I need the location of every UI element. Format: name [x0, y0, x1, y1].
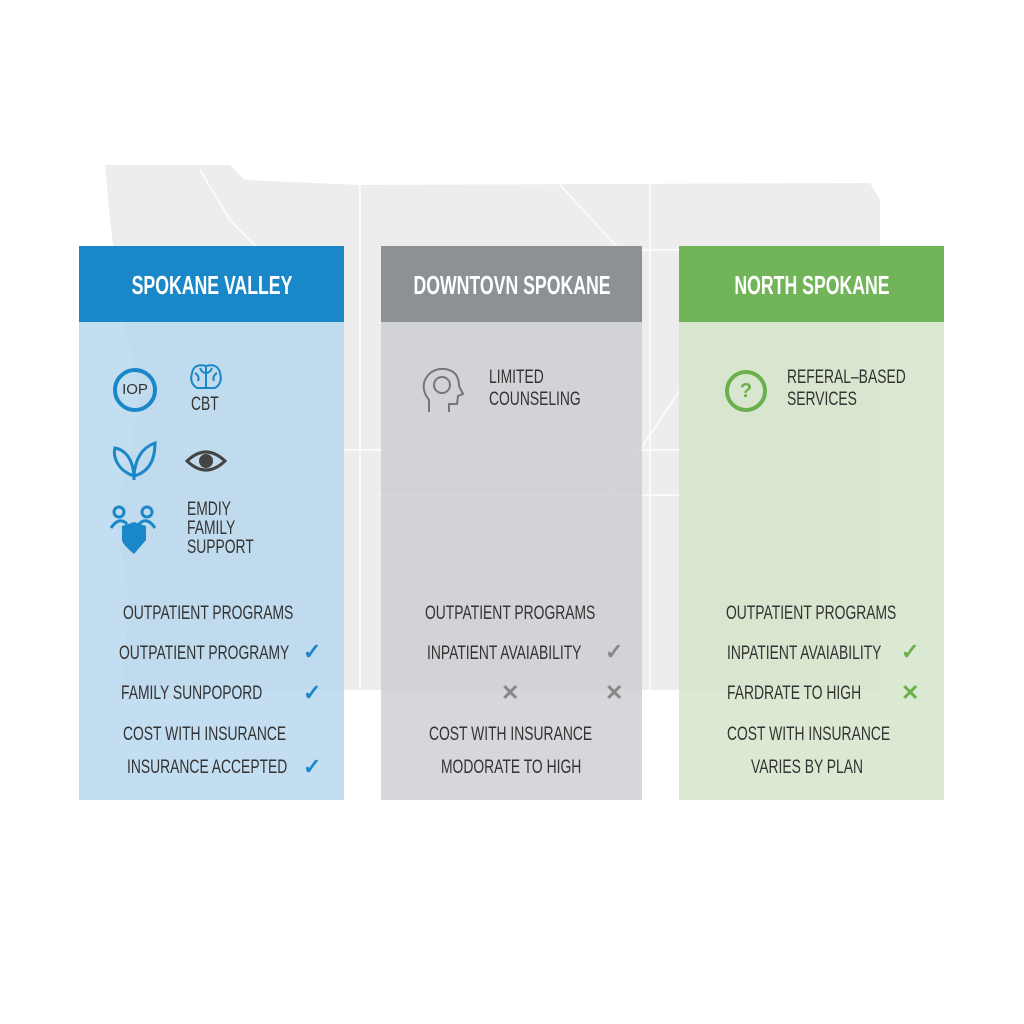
panel: Downtown Spokane	[381, 246, 642, 800]
heading: Downtown Spokane: DOWNTOVN SPOKANE	[413, 270, 610, 300]
icon: question bubble: ?	[740, 380, 752, 402]
panel: Downtown Spokane: ✓	[605, 639, 623, 664]
panel: Spokane Valley: ✓	[303, 754, 321, 779]
heading: Spokane Valley	[79, 246, 344, 322]
panel: Downtown Spokane: OUTPATIENT PROGRAMS	[425, 603, 595, 624]
panel: North Spokane	[679, 246, 944, 800]
text: EMDIY family support	[187, 499, 254, 558]
text: limited counseling	[489, 367, 581, 410]
text: CBT: CBT	[191, 394, 219, 415]
icon: leaf	[112, 440, 156, 480]
text: limited counseling: COUNSELING	[489, 389, 581, 410]
icon: head	[422, 368, 464, 412]
panel: Spokane Valley: COST WITH INSURANCE	[123, 724, 286, 745]
panel: Spokane Valley: FAMILY SUNPOPORD	[121, 683, 262, 704]
icon: question bubble	[725, 370, 767, 412]
heading: Downtown Spokane	[381, 246, 642, 322]
text: EMDIY family support: SUPPORT	[187, 537, 254, 558]
icon: IOP	[113, 368, 157, 412]
text: referral-based services	[787, 367, 906, 410]
heading: North Spokane: NORTH SPOKANE	[734, 270, 889, 300]
text: EMDIY family support: FAMILY	[187, 518, 235, 539]
panel: North Spokane: INPATIENT AVAIABILITY	[727, 643, 881, 664]
panel: Spokane Valley: ✓	[303, 639, 321, 664]
heading: Spokane Valley: SPOKANE VALLEY	[131, 270, 292, 300]
icon: family shield	[110, 506, 156, 554]
panel: North Spokane: ✓	[901, 639, 919, 664]
panel: North Spokane: VARIES BY PLAN	[751, 757, 863, 778]
panel: North Spokane: ✕	[901, 680, 919, 705]
panel: North Spokane: COST WITH INSURANCE	[727, 724, 890, 745]
icon: brain	[190, 364, 222, 389]
panel: Spokane Valley	[79, 246, 344, 800]
text: limited counseling: LIMITED	[489, 367, 544, 388]
panel: Spokane Valley: ✓	[303, 680, 321, 705]
panel: Downtown Spokane: ✕	[605, 680, 623, 705]
panel: Downtown Spokane: INPATIENT AVAIABILITY	[427, 643, 581, 664]
panel: North Spokane: OUTPATIENT PROGRAMS	[726, 603, 896, 624]
icon: IOP: IOP	[122, 381, 148, 398]
panel: Downtown Spokane: MODORATE TO HIGH	[441, 757, 581, 778]
heading: North Spokane	[679, 246, 944, 322]
panel: Spokane Valley: OUTPATIENT PROGRAMS	[123, 603, 293, 624]
panel: Downtown Spokane: COST WITH INSURANCE	[429, 724, 592, 745]
panel: Spokane Valley: OUTPATIENT PROGRAMY	[119, 643, 289, 664]
panel: Downtown Spokane: ✕	[501, 680, 519, 705]
text: referral-based services: REFERAL–BASED	[787, 367, 906, 388]
panel: Spokane Valley: INSURANCE ACCEPTED	[127, 757, 287, 778]
text: EMDIY family support: EMDIY	[187, 499, 231, 520]
text: referral-based services: SERVICES	[787, 389, 857, 410]
icon: eye	[185, 450, 227, 472]
panel: North Spokane: FARDRATE TO HIGH	[727, 683, 861, 704]
